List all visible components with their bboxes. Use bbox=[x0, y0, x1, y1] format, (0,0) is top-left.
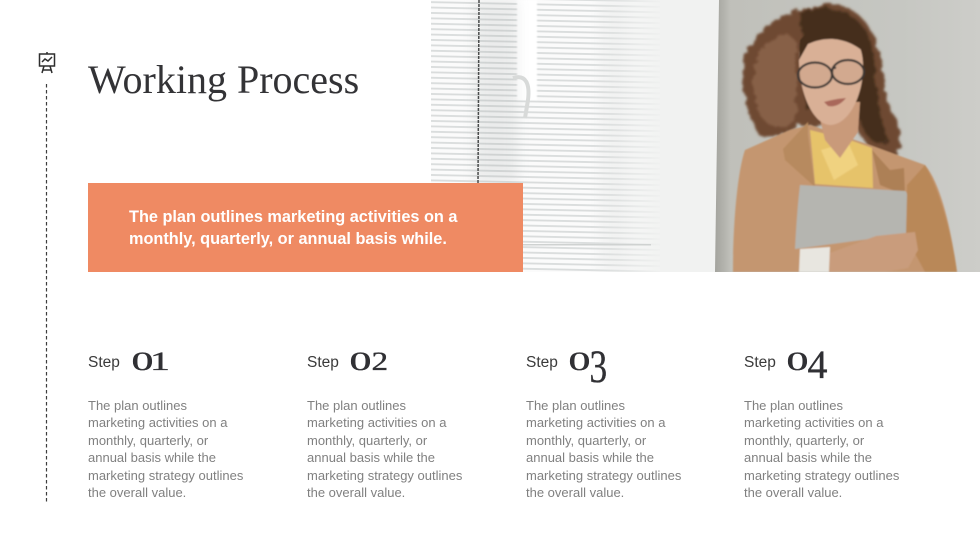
step 4 text: marketing activities on a bbox=[744, 415, 883, 430]
step 3 text: The plan outlines bbox=[526, 398, 625, 413]
step 2 bbox=[307, 346, 462, 500]
step 3 text: marketing strategy outlines bbox=[526, 468, 681, 483]
grey wall bbox=[715, 0, 980, 272]
callout text: The plan outlines marketing activities on a bbox=[129, 208, 457, 226]
step 1 text: marketing strategy outlines bbox=[88, 468, 243, 483]
callout bbox=[88, 183, 523, 272]
step 2 text: monthly, quarterly, or bbox=[307, 433, 427, 448]
step 1 text: The plan outlines bbox=[88, 398, 187, 413]
step 1 text: the overall value. bbox=[88, 485, 186, 500]
step 3 number: 0 bbox=[568, 347, 590, 376]
photo: woman holding a laptop beside window blinds bbox=[431, 0, 980, 272]
blazer bbox=[733, 125, 957, 272]
window blinds bbox=[431, 0, 665, 272]
yellow shirt bbox=[810, 130, 873, 188]
icon: presentation board bbox=[38, 52, 56, 74]
step 2 text: marketing strategy outlines bbox=[307, 468, 462, 483]
step 4 label: Step bbox=[744, 354, 776, 371]
laptop bbox=[795, 185, 907, 249]
sleeve cuff bbox=[799, 247, 830, 272]
window frame column bbox=[660, 0, 720, 272]
woman bbox=[733, 5, 957, 272]
step 3 text bbox=[526, 398, 681, 500]
hand bbox=[830, 232, 918, 272]
dashed timeline bbox=[46, 84, 48, 502]
hair bbox=[743, 5, 900, 158]
glasses bbox=[798, 60, 864, 88]
callout text: monthly, quarterly, or annual basis while. bbox=[129, 230, 447, 248]
step 2 text: The plan outlines bbox=[307, 398, 406, 413]
step 1 text: marketing activities on a bbox=[88, 415, 227, 430]
step 3 label: Step bbox=[526, 354, 558, 371]
step 3 text: marketing activities on a bbox=[526, 415, 665, 430]
step 1 number: 1 bbox=[150, 347, 170, 376]
step 3 text: the overall value. bbox=[526, 485, 624, 500]
step 1 bbox=[88, 347, 243, 500]
step 3 text: annual basis while the bbox=[526, 450, 654, 465]
step 4 text: annual basis while the bbox=[744, 450, 872, 465]
step 2 text bbox=[307, 398, 462, 500]
step 1 label: Step bbox=[88, 354, 120, 371]
step 2 text: annual basis while the bbox=[307, 450, 435, 465]
step 4 number: 0 bbox=[786, 347, 808, 376]
step 4 text: The plan outlines bbox=[744, 398, 843, 413]
step 4 bbox=[744, 342, 899, 500]
callout text bbox=[129, 208, 458, 248]
step 4 number: 4 bbox=[808, 342, 828, 387]
step 4 text: marketing strategy outlines bbox=[744, 468, 899, 483]
step 4 text bbox=[744, 398, 899, 500]
step 3 bbox=[526, 340, 681, 500]
step 4 text: the overall value. bbox=[744, 485, 842, 500]
step 3 text: monthly, quarterly, or bbox=[526, 433, 646, 448]
step 3 number: 3 bbox=[590, 340, 607, 392]
step 1 text: monthly, quarterly, or bbox=[88, 433, 208, 448]
step 2 label: Step bbox=[307, 354, 339, 371]
step 3 number bbox=[568, 340, 607, 392]
face bbox=[799, 29, 863, 125]
step 4 text: monthly, quarterly, or bbox=[744, 433, 864, 448]
step 2 text: the overall value. bbox=[307, 485, 405, 500]
step 2 text: marketing activities on a bbox=[307, 415, 446, 430]
step 4 number bbox=[786, 342, 828, 387]
title: Working Process bbox=[88, 57, 359, 102]
step 2 number: 2 bbox=[372, 346, 388, 376]
step 1 number: 0 bbox=[132, 347, 153, 376]
step 1 text bbox=[88, 398, 243, 500]
neck bbox=[816, 102, 860, 158]
step 2 number bbox=[350, 346, 388, 376]
step 1 text: annual basis while the bbox=[88, 450, 216, 465]
step 2 number: 0 bbox=[350, 347, 371, 376]
step 1 number bbox=[132, 347, 170, 376]
